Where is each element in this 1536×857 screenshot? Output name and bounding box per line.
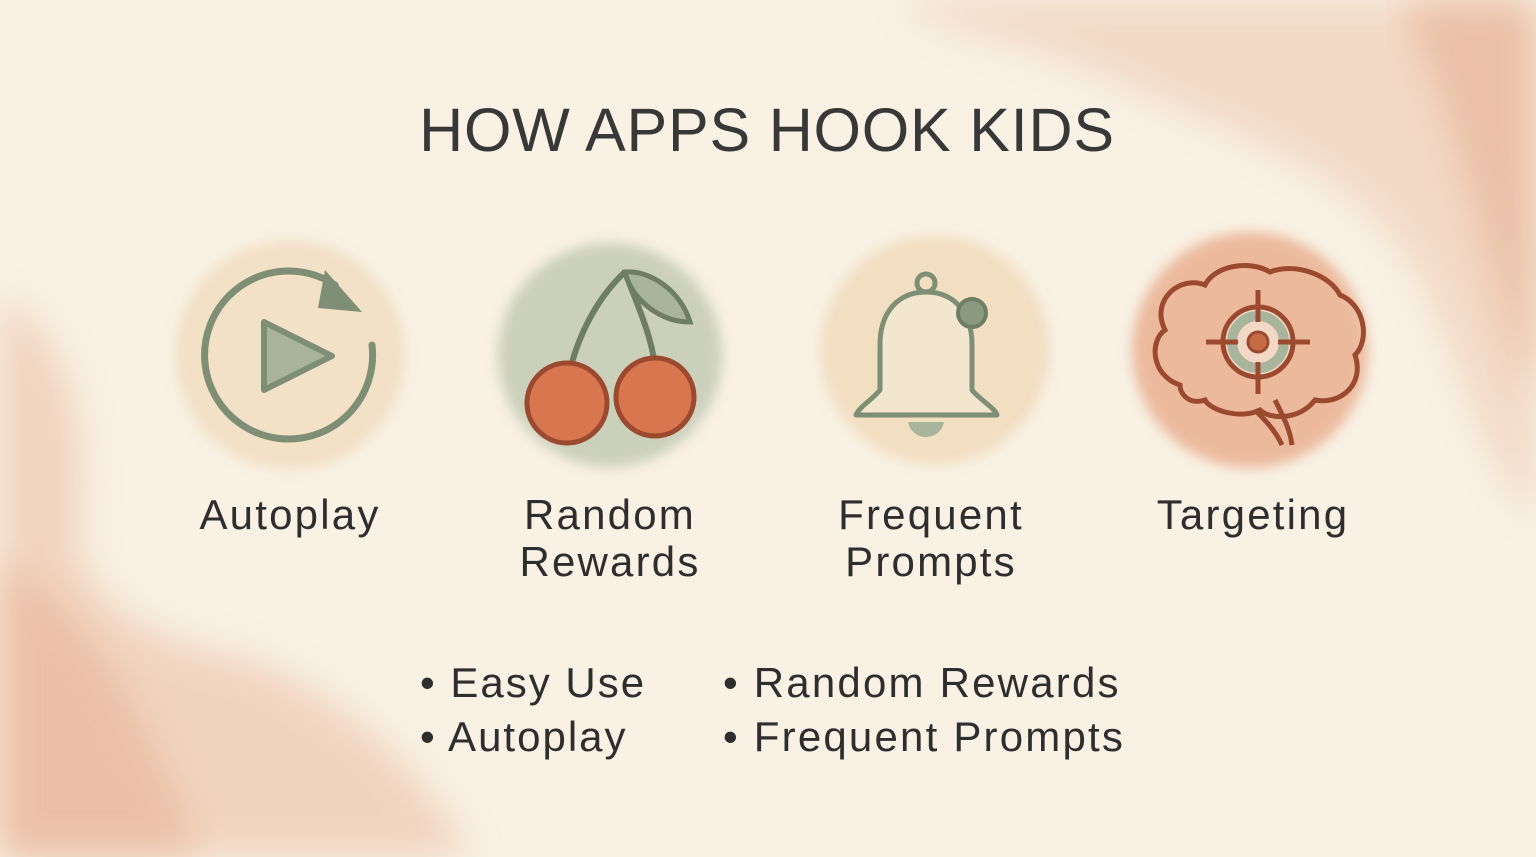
label: Autoplay: Autoplay <box>199 491 381 538</box>
label: Frequent Prompts: Frequent <box>838 491 1024 538</box>
label: Random Rewards: Random <box>524 491 696 538</box>
bullet list left: • Easy Use <box>420 659 646 706</box>
bullet list left: • Autoplay <box>420 713 628 760</box>
icon: brain target <box>1132 232 1368 468</box>
label: Random Rewards: Rewards <box>519 538 701 585</box>
title: HOW APPS HOOK KIDS <box>419 96 1115 164</box>
icon: bell <box>820 235 1050 465</box>
icon: autoplay <box>175 240 405 470</box>
icon: cherries <box>498 243 722 467</box>
label: Frequent Prompts: Prompts <box>845 538 1017 585</box>
bullet list right: • Random Rewards <box>723 659 1121 706</box>
label: Targeting: Targeting <box>1157 491 1349 538</box>
bullet list right: • Frequent Prompts <box>723 713 1125 760</box>
